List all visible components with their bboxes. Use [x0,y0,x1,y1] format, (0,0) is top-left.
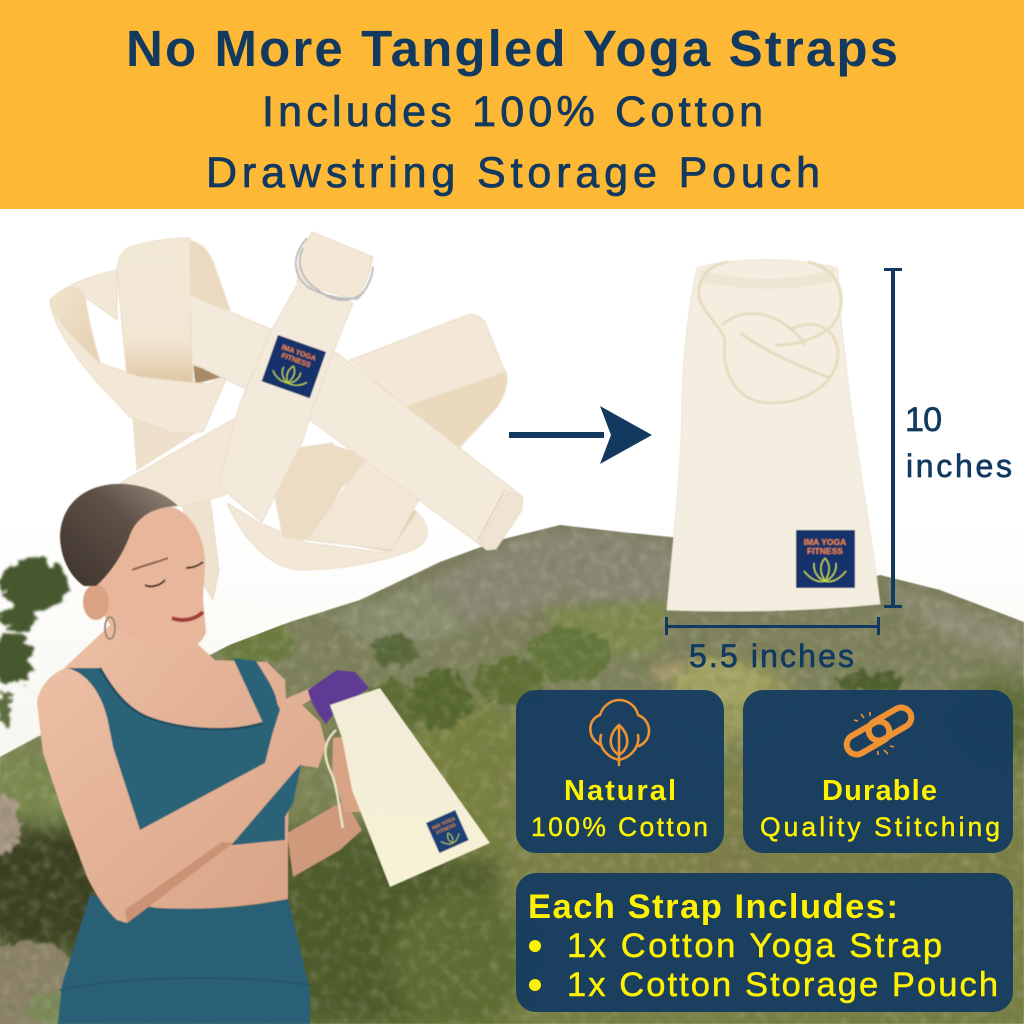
panel: durable [743,690,1013,853]
earring [105,617,115,639]
pouch tag [796,530,855,588]
cotton bag [330,688,490,887]
crop top [67,658,302,845]
subtitle line 2: Drawstring Storage Pouch [206,149,820,197]
strap: vertical left band [185,241,230,310]
title: No More Tangled Yoga Straps [126,20,898,77]
icon: cotton boll [590,700,649,765]
strap: bottom curve [227,503,427,570]
pouch drawstrings [699,262,841,403]
ear [83,584,109,620]
bag drawstring [325,730,343,828]
strap logo tag [262,335,326,398]
photo background: sky, mountain and vegetation [0,524,1024,1024]
label: inches: inches [906,448,1012,484]
arrow [509,406,652,464]
front arm and hand [37,668,328,923]
header banner [0,0,1024,209]
panel: each strap includes [516,873,1013,1012]
vegetation texture [2,528,1024,963]
strap: right band [400,370,507,447]
label: 5.5 inches: 5.5 inches [689,638,854,674]
bag logo tag: FITNESS [435,822,458,836]
strap: back strips [133,417,200,470]
strap logo tag: IMA YOGA [280,342,317,363]
strap: lower-left band [120,417,262,507]
subtitle line 1: Includes 100% Cotton [262,88,763,136]
durable heading: Durable [822,775,937,807]
includes heading: Each Strap Includes: [528,888,898,926]
natural subtext: 100% Cotton [531,812,708,842]
strap: main vertical band [220,285,353,522]
tangled cotton yoga strap [50,232,523,600]
width dimension: 5.5 inches [665,617,880,674]
bullet 2: 1x Cotton Storage Pouch [567,966,998,1004]
height dimension: 10 inches [884,268,1012,608]
strap: lower right band [307,460,420,550]
purple rolled strap and cotton bag in hand [308,670,490,887]
face [95,505,206,649]
woman [37,484,362,1024]
far hand [332,736,362,812]
pouch tag: FITNESS [807,546,843,556]
strap: left loop [50,270,227,433]
left tree [0,559,118,726]
hair [60,484,178,586]
bullet 1: 1x Cotton Yoga Strap [567,927,942,965]
pouch tag: IMA YOGA [804,537,846,547]
shrubs and bushes [0,625,904,1024]
eyes and lips [132,558,203,620]
chain sparks [854,712,894,755]
icon: chain link [843,704,915,758]
forearm shading [125,842,233,923]
neck, chest and midriff [60,625,290,909]
bag logo tag: IMA YOGA [431,816,457,832]
panel: natural [516,690,724,853]
mountain [0,525,1024,1024]
drawstring pouch [667,260,880,611]
durable subtext: Quality Stitching [760,812,1000,842]
mountain rock patches [330,530,1024,680]
strap: long diagonal [190,295,523,550]
leggings [58,895,310,1024]
strap logo tag: FITNESS [280,351,312,369]
D-rings [296,238,373,300]
far arm [287,800,362,877]
natural heading: Natural [564,775,676,807]
label: 10: 10 [905,401,942,439]
foreground vegetation [0,525,1024,1024]
bag logo tag [426,810,469,853]
purple strap roll [308,670,369,724]
